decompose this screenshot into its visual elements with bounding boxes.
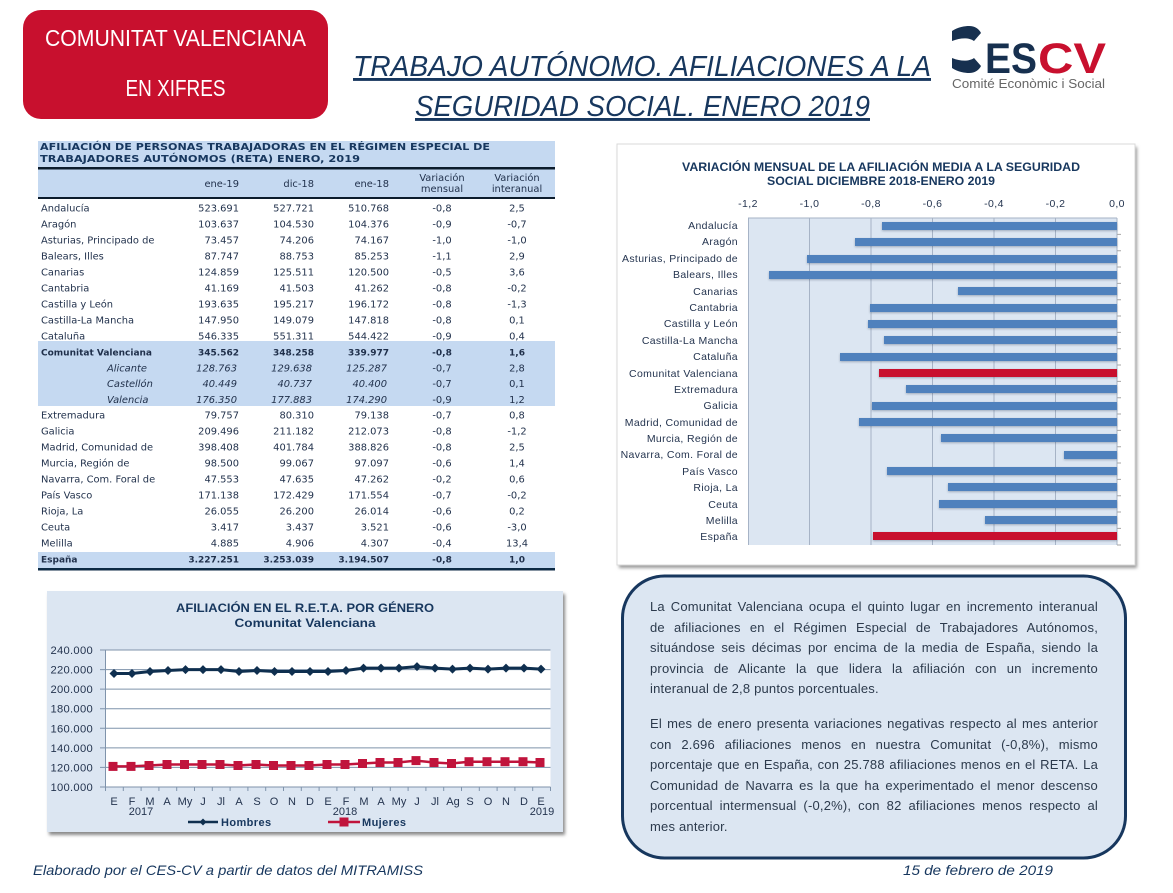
table rows: -0,8 — [432, 204, 452, 214]
table rows: 209.496 — [198, 426, 239, 438]
x axis labels: A — [235, 796, 243, 808]
x axis labels: D — [520, 796, 528, 808]
x axis labels: J — [414, 796, 420, 808]
table rows: 147.950 — [198, 316, 239, 326]
table rows: -0,7 — [432, 379, 452, 390]
callout text: con 2.696 afiliaciones menos en nuestra Comunitat (-0,8%), mismo — [650, 736, 1098, 752]
logo: CES-CV: ES — [985, 35, 1037, 83]
category labels: Castilla-La Mancha — [642, 335, 738, 347]
table rows: 26.200 — [279, 506, 314, 518]
y axis labels: 220.000 — [50, 665, 93, 677]
horizontal bars — [769, 222, 1117, 540]
table rows: 47.553 — [204, 474, 239, 486]
table rows: 211.182 — [273, 426, 314, 438]
table rows: -0,6 — [432, 522, 452, 534]
table rows: Asturias, Principado de — [41, 236, 154, 246]
table rows: 0,1 — [509, 379, 525, 390]
category labels: Aragón — [702, 236, 738, 248]
table rows: Ceuta — [41, 522, 70, 534]
table rows: Murcia, Región de — [41, 458, 129, 470]
table rows: Valencia — [107, 395, 148, 406]
table title — [40, 140, 490, 165]
table rows: -1,3 — [507, 300, 527, 310]
table rows: 1,2 — [509, 395, 525, 406]
category labels: Rioja, La — [693, 482, 738, 494]
table column headers: dic-18 — [283, 179, 314, 190]
table title: AFILIACIÓN DE PERSONAS TRABAJADORAS EN EL RÉGIMEN ESPECIAL DE — [40, 140, 490, 153]
table rows: Alicante — [106, 364, 147, 374]
table column headers: mensual — [421, 184, 463, 195]
x axis labels: M — [145, 796, 155, 808]
table rows: 388.826 — [348, 442, 389, 454]
table rows: -0,8 — [432, 284, 452, 294]
table rows: 3.437 — [286, 522, 314, 534]
callout text: provincia de Alicante la que lidera la afiliación con un incremento — [650, 660, 1098, 676]
table rows: 1,4 — [509, 458, 525, 470]
table rows: 0,2 — [509, 506, 525, 518]
table rows: 88.753 — [279, 252, 314, 262]
x axis labels: A — [377, 796, 385, 808]
table rows: Extremadura — [41, 410, 105, 422]
table rows: 40.737 — [277, 379, 313, 390]
table rows: 103.637 — [198, 220, 239, 230]
value axis labels: -0,4 — [984, 198, 1004, 210]
callout text: de afiliaciones en el Régimen Especial de Trabajadores Autónomos, — [650, 620, 1098, 634]
table rows: 2,8 — [509, 364, 525, 374]
main title: SEGURIDAD SOCIAL. ENERO 2019 — [415, 91, 870, 123]
x axis labels — [110, 796, 554, 818]
x axis labels: N — [502, 796, 510, 808]
table rows: -0,8 — [432, 556, 452, 566]
footer date: 15 de febrero de 2019 — [903, 862, 1053, 878]
table rows: 79.757 — [204, 410, 239, 422]
x axis labels: 2018 — [333, 806, 357, 818]
table rows: Andalucía — [41, 202, 90, 214]
category labels: España — [700, 531, 738, 543]
category labels: Balears, Illes — [673, 269, 738, 281]
table rows: 339.977 — [348, 348, 389, 358]
legend: Mujeres — [362, 817, 406, 829]
value axis labels: 0,0 — [1109, 198, 1125, 210]
callout text: interanual de 2,8 puntos porcentuales. — [650, 681, 879, 696]
table rows: 120.500 — [348, 268, 389, 278]
table rows: 80.310 — [279, 410, 314, 422]
table rows: -0,9 — [432, 395, 452, 406]
table rows: -0,8 — [432, 316, 452, 326]
table rows: -0,8 — [432, 300, 452, 310]
y axis labels: 100.000 — [50, 782, 93, 794]
table rows: -1,1 — [432, 252, 452, 262]
table rows: 176.350 — [196, 395, 237, 406]
main title — [353, 50, 931, 123]
callout text — [650, 599, 1098, 834]
table rows: 26.014 — [354, 506, 389, 518]
table rows: Aragón — [41, 218, 76, 230]
table rows: 47.262 — [354, 474, 389, 486]
header badge — [23, 10, 328, 119]
table rows: -0,2 — [507, 284, 527, 294]
category labels: País Vasco — [682, 466, 738, 478]
logo: CES-CV: Comité Econòmic i Social — [952, 77, 1105, 91]
table rows: Galicia — [41, 426, 74, 438]
table rows: 196.172 — [348, 300, 389, 310]
table rows: Madrid, Comunidad de — [41, 442, 153, 454]
table rows: 125.287 — [346, 364, 388, 374]
category labels: Ceuta — [708, 499, 738, 511]
category labels: Cantabria — [689, 302, 738, 314]
value axis labels: -0,8 — [861, 198, 881, 210]
x axis labels: E — [110, 796, 118, 808]
table rows: 3,6 — [509, 268, 525, 278]
bar chart title: SOCIAL DICIEMBRE 2018-ENERO 2019 — [767, 174, 995, 188]
table rows: 212.073 — [348, 426, 389, 438]
x axis labels: Ag — [446, 796, 460, 808]
table rows: Castilla-La Mancha — [41, 316, 134, 326]
table rows: 3.521 — [361, 522, 389, 534]
table rows: -0,2 — [432, 474, 452, 486]
table rows: -1,0 — [507, 236, 527, 246]
category labels: Extremadura — [674, 384, 738, 396]
callout text: porcentaje que en España, con 25.788 afiliaciones menos en el RETA. La — [650, 757, 1098, 772]
main title: TRABAJO AUTÓNOMO. AFILIACIONES A LA — [353, 50, 931, 83]
y axis labels: 180.000 — [50, 704, 93, 716]
x axis labels: D — [306, 796, 314, 808]
value axis labels: -1,0 — [800, 198, 819, 210]
table rows: 510.768 — [348, 204, 389, 214]
table rows: 47.635 — [279, 474, 314, 486]
table rows: 1,0 — [509, 556, 525, 566]
table rows: -0,9 — [432, 220, 452, 230]
table rows: Comunitat Valenciana — [41, 348, 152, 358]
table rows: 401.784 — [273, 442, 314, 454]
legend: Hombres — [221, 817, 271, 829]
data table — [38, 140, 555, 570]
category labels: Murcia, Región de — [647, 433, 738, 445]
bar chart title — [682, 160, 1080, 188]
table rows: Castellón — [107, 378, 153, 390]
value axis labels: -0,6 — [923, 198, 942, 210]
x axis labels: 2019 — [530, 806, 554, 818]
table rows: 4.307 — [361, 538, 389, 550]
table rows: Cantabria — [41, 284, 89, 294]
table rows: 527.721 — [273, 204, 314, 214]
value axis labels: -0,2 — [1046, 198, 1065, 210]
logo: CES-CV: CV — [1038, 35, 1106, 83]
table rows: 74.206 — [279, 236, 314, 246]
table rows: 3.227.251 — [188, 556, 239, 566]
table rows — [41, 202, 528, 566]
callout text: El mes de enero presenta variaciones negativas respecto al mes anterior — [650, 716, 1098, 731]
table rows: 398.408 — [198, 442, 239, 454]
value axis labels: -1,2 — [738, 198, 758, 210]
table rows: 0,4 — [509, 332, 525, 342]
category labels: Canarias — [693, 286, 738, 298]
x axis labels: O — [270, 796, 279, 808]
badge title: COMUNITAT VALENCIANA — [45, 25, 307, 51]
table column headers: Variación — [419, 172, 465, 184]
value axis labels — [738, 198, 1125, 210]
y axis labels: 120.000 — [50, 762, 93, 774]
y axis labels: 140.000 — [50, 743, 93, 755]
table rows: 345.562 — [198, 348, 239, 358]
footer source: Elaborado por el CES-CV a partir de datos del MITRAMISS — [33, 862, 424, 878]
callout text: porcentual intermensual (-0,2%), con 82 afiliaciones menos respecto al — [650, 798, 1098, 813]
table rows: 3.417 — [211, 522, 239, 534]
x axis labels: My — [392, 796, 407, 808]
table rows: -0,8 — [432, 426, 452, 438]
category labels — [621, 220, 738, 543]
y axis labels — [50, 645, 93, 794]
text callout box — [622, 576, 1126, 858]
table rows: 172.429 — [273, 490, 314, 502]
table rows: 2,5 — [509, 204, 525, 214]
x axis labels: A — [163, 796, 171, 808]
table rows: 125.511 — [273, 268, 314, 278]
table rows: 2,5 — [509, 442, 525, 454]
line chart title: AFILIACIÓN EN EL R.E.T.A. POR GÉNERO — [176, 601, 434, 615]
table column headers: ene-19 — [204, 179, 239, 190]
x axis labels: Jl — [217, 796, 225, 808]
table column headers: interanual — [492, 184, 542, 195]
table rows: -0,4 — [432, 538, 452, 550]
category labels: Navarra, Com. Foral de — [621, 449, 738, 461]
line chart title — [176, 601, 434, 630]
legend — [188, 817, 406, 829]
table rows: -0,5 — [432, 268, 452, 278]
category labels: Andalucía — [688, 220, 738, 232]
x axis labels: E — [324, 796, 332, 808]
category labels: Asturias, Principado de — [622, 253, 738, 265]
table column headers: ene-18 — [354, 179, 389, 190]
table rows: 174.290 — [346, 395, 387, 406]
table rows: 147.818 — [348, 316, 389, 326]
table rows: 193.635 — [198, 300, 239, 310]
x axis labels: M — [359, 796, 369, 808]
table rows: 85.253 — [354, 252, 389, 262]
table rows: 523.691 — [198, 204, 239, 214]
table rows: 129.638 — [271, 364, 312, 374]
table rows: 13,4 — [506, 538, 528, 550]
table rows: -0,7 — [507, 220, 527, 230]
logo: CES-CV — [952, 26, 1106, 91]
badge subtitle: EN XIFRES — [126, 75, 226, 101]
table rows: -0,7 — [432, 490, 452, 502]
table rows: 73.457 — [204, 236, 239, 246]
table rows: 0,1 — [509, 316, 525, 326]
callout text: situándose seis décimas por encima de la media de España, siendo la — [650, 640, 1098, 655]
table rows: 3.253.039 — [263, 556, 314, 566]
table rows: Balears, Illes — [41, 252, 104, 262]
table rows: -1,2 — [507, 426, 527, 438]
callout text: La Comunitat Valenciana ocupa el quinto lugar en incremento interanual — [650, 599, 1098, 614]
bar chart title: VARIACIÓN MENSUAL DE LA AFILIACIÓN MEDIA A LA SEGURIDAD — [682, 160, 1080, 174]
table rows: -0,2 — [507, 490, 527, 502]
table rows: 40.400 — [352, 379, 387, 390]
table rows: España — [41, 556, 78, 566]
table rows: 149.079 — [273, 316, 314, 326]
table rows: 195.217 — [273, 300, 314, 310]
category labels: Comunitat Valenciana — [629, 368, 738, 380]
table rows: 171.554 — [348, 490, 389, 502]
callout text: mes anterior. — [650, 818, 728, 834]
y axis labels: 240.000 — [50, 645, 93, 657]
x axis labels: N — [288, 796, 296, 808]
table rows: -0,6 — [432, 458, 452, 470]
table rows: 544.422 — [348, 332, 389, 342]
category labels: Melilla — [706, 515, 738, 527]
table rows: 41.262 — [354, 284, 389, 294]
table rows: Melilla — [41, 538, 73, 550]
table rows: -0,9 — [432, 332, 452, 342]
x axis labels: F — [343, 796, 350, 808]
table rows: 171.138 — [198, 490, 239, 502]
table rows: 4.906 — [286, 538, 314, 550]
x axis labels: J — [200, 796, 206, 808]
series: Mujeres — [113, 761, 540, 766]
bar chart panel — [617, 144, 1137, 568]
table rows: 551.311 — [273, 332, 314, 342]
table column headers — [204, 172, 542, 195]
table rows: 40.449 — [202, 379, 237, 390]
table rows: 1,6 — [509, 348, 525, 358]
category labels: Castilla y León — [664, 318, 738, 330]
table rows: 546.335 — [198, 332, 239, 342]
table rows: 104.530 — [273, 220, 314, 230]
table rows: 128.763 — [196, 364, 237, 374]
table rows: 0,6 — [509, 474, 525, 486]
table rows: 41.503 — [279, 284, 314, 294]
table rows: 4.885 — [211, 538, 239, 550]
table rows: -3,0 — [507, 522, 527, 534]
table rows: 348.258 — [273, 348, 314, 358]
table column headers: Variación — [494, 172, 540, 184]
y axis labels: 160.000 — [50, 723, 93, 735]
table rows: 98.500 — [204, 458, 239, 470]
table rows: 104.376 — [348, 220, 389, 230]
category labels: Madrid, Comunidad de — [625, 417, 738, 429]
table rows: 2,9 — [509, 252, 525, 262]
x axis labels: My — [178, 796, 193, 808]
table rows: 3.194.507 — [338, 556, 389, 566]
table rows: Rioja, La — [41, 506, 83, 518]
table rows: 87.747 — [204, 252, 239, 262]
x axis labels: E — [537, 796, 545, 808]
table rows: 74.167 — [354, 236, 389, 246]
x axis labels: 2017 — [129, 806, 153, 818]
table rows: -0,6 — [432, 506, 452, 518]
line chart panel — [47, 591, 565, 835]
table rows: 97.097 — [354, 458, 389, 470]
table rows: -1,0 — [432, 236, 452, 246]
table rows: 79.138 — [354, 410, 389, 422]
table rows: País Vasco — [41, 490, 92, 502]
table title: TRABAJADORES AUTÓNOMOS (RETA) ENERO, 2019 — [40, 152, 360, 165]
category labels: Galicia — [703, 400, 738, 412]
callout text: Comunidad de Navarra es la que ha experimentado el menor descenso — [650, 778, 1098, 792]
y axis labels: 200.000 — [50, 684, 93, 696]
x axis labels: F — [129, 796, 136, 808]
x axis labels: O — [484, 796, 493, 808]
x axis labels: Jl — [431, 796, 439, 808]
x axis labels: S — [253, 796, 261, 808]
table rows: 41.169 — [204, 284, 239, 294]
table rows: Castilla y León — [41, 298, 113, 310]
table rows: -0,7 — [432, 364, 452, 374]
table rows: Canarias — [41, 268, 84, 278]
table rows: -0,8 — [432, 348, 452, 358]
table rows: 99.067 — [279, 458, 314, 470]
table rows: Navarra, Com. Foral de — [41, 474, 155, 486]
table rows: 26.055 — [204, 506, 239, 518]
table rows: -0,7 — [432, 410, 452, 422]
table rows: 177.883 — [271, 395, 312, 406]
category labels: Cataluña — [693, 351, 738, 363]
table rows: -0,8 — [432, 442, 452, 454]
line chart title: Comunitat Valenciana — [234, 616, 376, 630]
table rows: Cataluña — [41, 332, 85, 342]
series: Hombres — [114, 667, 541, 674]
x axis labels: S — [466, 796, 474, 808]
table rows: 124.859 — [198, 268, 239, 278]
table rows: 0,8 — [509, 410, 525, 422]
